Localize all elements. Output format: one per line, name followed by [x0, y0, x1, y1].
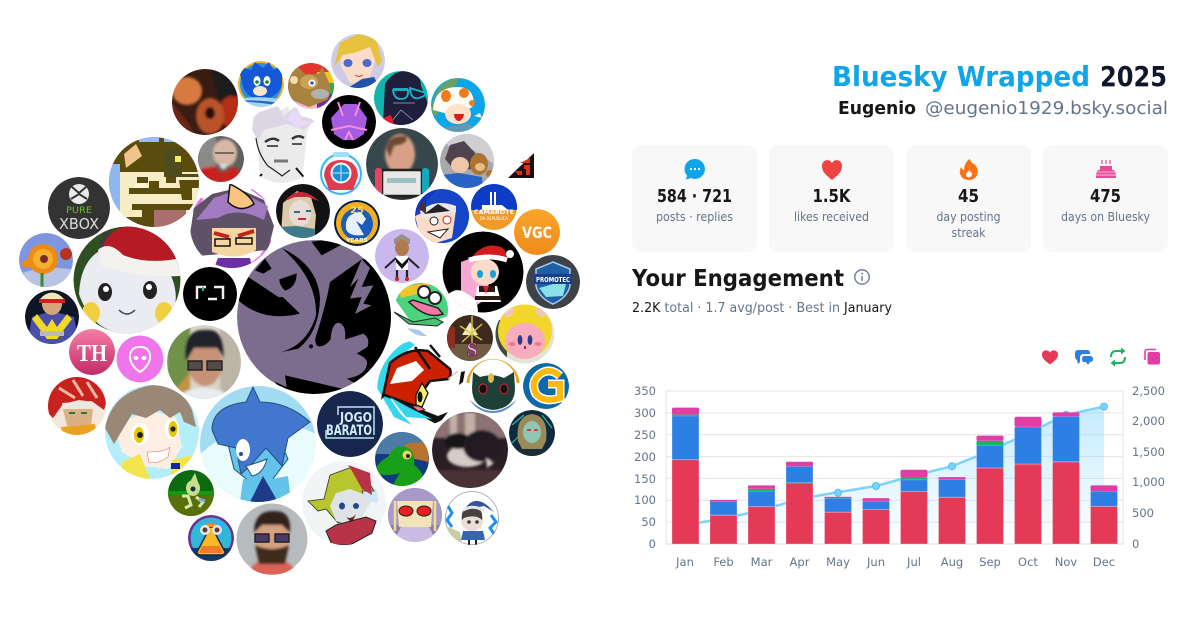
avatar: flask with eyes	[188, 515, 234, 561]
cumulative line	[685, 403, 1108, 525]
icon: quotes copy	[1145, 350, 1160, 364]
stacked bars: quotes	[672, 408, 1118, 502]
avatar: kirby plush	[496, 304, 554, 364]
avatar: pixel ash trainer	[25, 290, 79, 344]
panel: likes received: likes received	[794, 210, 869, 224]
avatar: TH monogram	[69, 329, 115, 375]
avatar: 25 years emblem	[334, 200, 380, 246]
month labels: Jul	[906, 555, 921, 569]
panel: posts and replies	[632, 145, 757, 252]
avatar: VGC: VGC	[522, 223, 552, 242]
avatar: umbreon plush with gold ring	[466, 358, 520, 413]
month labels: May	[826, 555, 850, 569]
avatar: crono	[47, 376, 107, 435]
user name and handle: @eugenio1929.bsky.social	[925, 98, 1168, 119]
month labels: Nov	[1055, 555, 1077, 569]
avatar: pure xbox logo	[48, 177, 110, 239]
avatar: red eyed nun character	[388, 488, 442, 542]
title: 2025	[1100, 60, 1167, 93]
avatar: green frog	[394, 283, 448, 337]
avatar: black and white cat photo	[432, 412, 508, 488]
right axis labels: 2,500	[1132, 384, 1165, 398]
panel: days on bluesky	[1043, 145, 1168, 252]
month labels: Aug	[941, 555, 963, 569]
avatar: pride bear animatronic	[288, 63, 334, 109]
avatar: jogo barato: JOGO	[339, 411, 372, 426]
month labels: Feb	[713, 555, 734, 569]
chart: engagement by month	[634, 384, 1165, 569]
avatar: cow character on lilac	[375, 229, 429, 283]
icon: replies bubbles	[1075, 350, 1093, 365]
avatar: black logo	[183, 267, 237, 321]
avatar: bald man photo	[198, 136, 244, 182]
avatar: pure xbox logo: XBOX	[59, 215, 99, 233]
left axis labels: 0	[649, 537, 656, 551]
month labels	[675, 555, 1115, 569]
avatar: toon link	[302, 461, 386, 545]
panel: posts and replies: 584 · 721	[657, 186, 732, 207]
panel: day posting streak: streak	[952, 226, 986, 240]
avatar: pure xbox logo: PURE	[66, 206, 92, 216]
avatar: red and white latias style head	[377, 340, 463, 426]
icon: likes heart	[1042, 350, 1058, 364]
avatar: jogo barato: BARATO	[326, 423, 372, 439]
left axis labels: 200	[634, 450, 656, 464]
panel: day posting streak: 45	[958, 186, 979, 207]
avatar: sonic cap character	[415, 189, 469, 243]
month labels: Jan	[675, 555, 694, 569]
avatar: lapis lazuli	[200, 386, 316, 502]
right axis labels: 1,500	[1132, 445, 1165, 459]
month labels: Mar	[751, 555, 773, 569]
avatar: TH monogram: TH	[77, 341, 107, 367]
avatar: toad	[431, 78, 485, 132]
avatar cluster	[19, 34, 580, 575]
stacked bars: reposts	[672, 415, 1004, 498]
panel: likes received	[769, 145, 894, 252]
icon: triangular FT logo	[508, 153, 534, 178]
month labels: Dec	[1093, 555, 1115, 569]
avatar: emolga plush with santa hat	[74, 226, 182, 334]
stacked bars: likes	[672, 460, 1118, 544]
avatar: capcom style C	[523, 363, 569, 409]
left axis labels: 250	[634, 428, 656, 442]
avatar: manga character grayscale	[252, 106, 314, 183]
engagement summary: 2.2K total · 1.7 avg/post · Best in January	[632, 300, 892, 316]
avatar: pixel art face	[109, 137, 199, 227]
avatar: promotec shield: PROMOTEC	[536, 276, 570, 284]
panel: likes received: 1.5K	[812, 186, 851, 207]
left axis labels	[634, 384, 656, 551]
avatar: camarote da republica: CAMAROTE	[474, 209, 514, 216]
avatar: large purple creature on black	[237, 240, 391, 394]
user name and handle: Eugenio	[838, 98, 916, 119]
month labels: Jun	[866, 555, 885, 569]
avatar: harley quinn	[276, 184, 330, 238]
stacked bars: replies	[672, 416, 1118, 515]
avatar: sonic	[238, 61, 284, 107]
icon: black slash mark	[459, 371, 465, 385]
avatar: purple dragon emblem	[322, 95, 376, 149]
cumulative area	[685, 407, 1104, 544]
avatar: S emblem: S	[466, 339, 478, 361]
right axis labels	[1132, 384, 1165, 551]
month labels: Oct	[1018, 555, 1038, 569]
right axis labels: 500	[1132, 506, 1154, 520]
panel: days on bluesky: days on Bluesky	[1061, 210, 1150, 224]
panel: day posting streak: day posting	[936, 210, 1000, 224]
left axis labels: 150	[634, 472, 656, 486]
left axis labels: 100	[634, 493, 656, 507]
heading: your engagement: Your Engagement	[631, 266, 844, 292]
avatar: 25 years emblem: YEARS	[345, 238, 368, 244]
chart grid	[666, 391, 1123, 544]
avatar: promotec shield	[526, 255, 580, 309]
panel: days on bluesky: 475	[1090, 186, 1121, 207]
icon: info	[855, 270, 869, 284]
avatar: chibi with santa hat and lightning	[445, 491, 499, 545]
avatar: young man with glasses photo	[167, 325, 241, 399]
avatar: man holding nintendo switch	[366, 128, 438, 200]
title: Bluesky Wrapped	[832, 60, 1090, 93]
avatar: hooded woman	[509, 410, 555, 456]
icon: reposts arrows	[1110, 348, 1126, 366]
month labels: Sep	[979, 555, 1001, 569]
avatar: celebi	[168, 470, 214, 516]
avatar: darth vader with sunglasses	[374, 71, 429, 125]
avatar: jogo barato	[317, 391, 383, 457]
avatar: brown haired anime boy	[105, 385, 199, 479]
panel: day posting streak	[906, 145, 1031, 252]
right axis labels: 0	[1132, 537, 1139, 551]
avatar: green crocodile kremling	[375, 432, 429, 486]
avatar: 25 years emblem: 25	[350, 206, 364, 216]
left axis labels: 350	[634, 384, 656, 398]
legend icons	[1042, 348, 1160, 366]
avatar: diver helmet	[318, 151, 364, 197]
avatar: blonde anime girl	[331, 34, 385, 88]
avatar: purple haired character with glasses	[190, 184, 274, 268]
avatar: bearded man photo	[236, 504, 308, 575]
avatar: boy with monkey	[440, 134, 494, 188]
avatar: VGC	[514, 209, 560, 255]
right axis labels: 2,000	[1132, 414, 1165, 428]
right axis labels: 1,000	[1132, 475, 1165, 489]
avatar: sunflower	[19, 233, 73, 287]
panel: posts and replies: posts · replies	[656, 210, 733, 224]
avatar: camarote da republica	[471, 184, 517, 230]
avatar: pink haired santa girl	[442, 232, 524, 313]
left axis labels: 50	[641, 515, 656, 529]
month labels: Apr	[790, 555, 810, 569]
avatar: red-tinted photo of two faces	[172, 69, 245, 135]
avatar: camarote da republica: DA REPUBLICA	[480, 216, 508, 221]
left axis labels: 300	[634, 406, 656, 420]
avatar: alien head	[116, 336, 164, 382]
avatar: S emblem	[447, 315, 493, 361]
